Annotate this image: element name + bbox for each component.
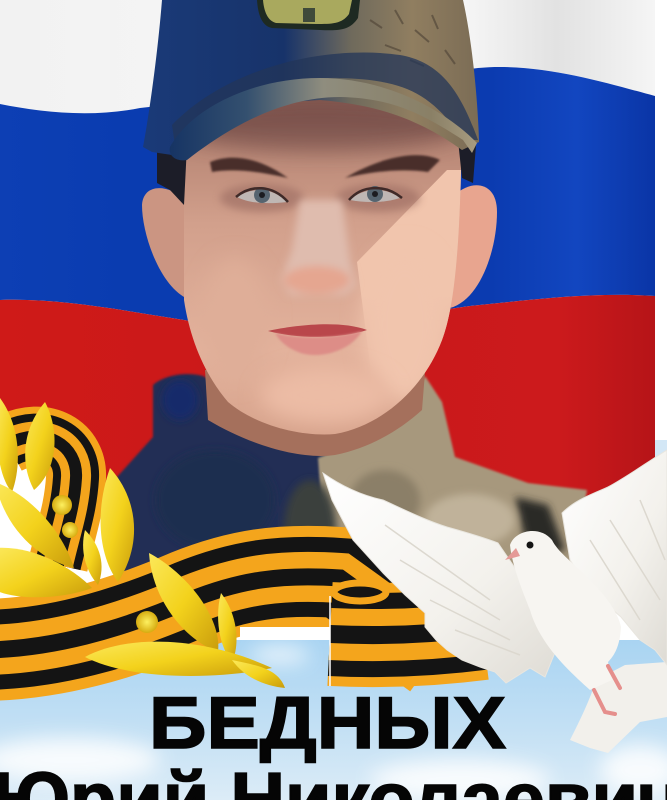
dove feet [594,666,620,714]
lips [268,324,367,355]
dove beak [505,548,520,560]
flag red stripe [0,295,655,520]
St George ribbon: right fold [330,583,482,686]
golden laurel branch [0,398,285,688]
neck [205,370,425,456]
cap brim [170,78,477,160]
dove eye [526,542,534,548]
right eyebrow [345,155,440,178]
dove tail [570,662,667,753]
hair at temples [157,140,476,205]
Russian flag [0,0,655,520]
left eyebrow [210,158,288,178]
cap camouflage marks [370,10,455,66]
cap band [172,53,478,145]
flag white stripe [0,0,655,113]
nose [281,200,356,295]
jacket: tan side [318,376,587,630]
right ear [450,185,497,308]
sunlit cheek [357,170,461,356]
white strip under ribbon [240,627,332,640]
berries [52,495,158,633]
St George ribbon: left loop [8,437,76,565]
dove wing feathers [385,500,665,655]
white dove [323,450,667,753]
left ear [142,188,186,298]
leaves [25,402,55,490]
right eye [349,186,402,202]
face [184,100,462,434]
flag blue stripe [0,67,655,330]
left eye [236,187,288,203]
jacket: navy side [117,374,340,630]
cap badge [257,0,360,30]
surname: БЕДНЫХ [149,683,506,764]
soldier portrait [117,0,587,630]
dove body [510,531,621,690]
dove right wing [562,450,667,665]
cap crown [143,0,479,155]
St George ribbon: main band [0,577,440,650]
dove left wing [323,473,560,683]
